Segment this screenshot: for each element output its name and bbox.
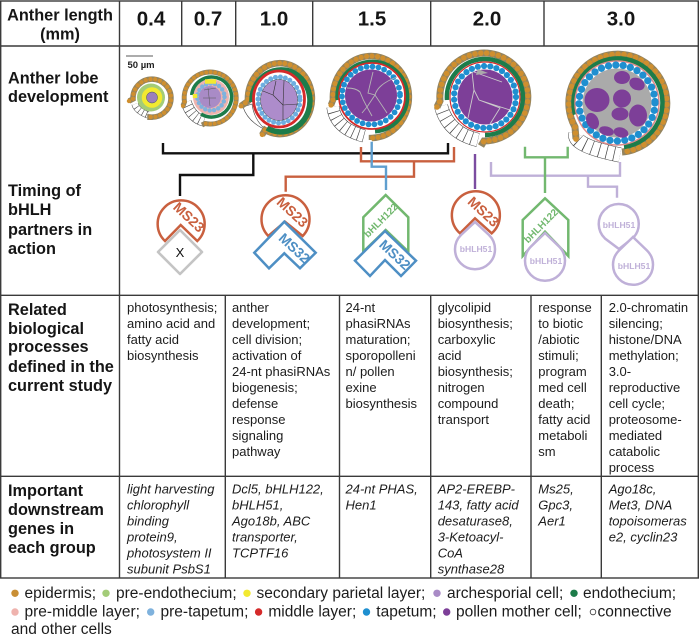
processes: column 3: exine <box>346 380 377 395</box>
processes: column 6: histone/DNA <box>609 332 682 347</box>
processes: column 4 <box>438 300 513 427</box>
genes: column 6: Ago18c, <box>608 482 656 496</box>
legend: secondary parietal layer; <box>256 585 425 602</box>
processes: column 1: photosynthesis; <box>127 300 217 315</box>
genes: column 6: topoisomeras <box>609 514 687 528</box>
heading: important downstream genes <box>8 482 104 557</box>
legend: pre-middle layer; <box>24 603 140 620</box>
genes: column 1 <box>126 482 215 576</box>
heading: anther lobe development <box>8 70 109 106</box>
genes: column 5: Gpc3, <box>538 498 573 512</box>
heading: important downstream genes: each group <box>8 539 96 557</box>
genes: column 1: chlorophyll <box>127 498 190 512</box>
genes: column 2: transporter, <box>232 530 298 544</box>
connector: purple line <box>474 154 476 189</box>
partners: bHLH122 and MS32 <box>355 195 416 276</box>
anther lobe 1.5 mm <box>331 56 409 140</box>
genes: column 2: Dcl5, bHLH122, <box>232 482 324 496</box>
genes: column 2: TCPTF16 <box>232 546 289 560</box>
legend <box>11 585 676 635</box>
anther lobe 3.0 mm <box>569 54 667 155</box>
processes: column 5: to biotic <box>538 316 584 331</box>
processes: column 4: transport <box>438 412 489 427</box>
heading: important downstream genes: downstream <box>8 501 104 519</box>
genes: column 4: 143, fatty acid <box>438 498 519 512</box>
partners: bHLH122 and bHLH51: bHLH122 <box>522 207 561 246</box>
anther length values: 2.0 <box>473 8 501 30</box>
processes: column 3: sporopolleni <box>346 348 416 363</box>
heading: related biological processes: processes <box>8 338 89 356</box>
connector: light purple bracket <box>491 162 620 198</box>
partners: MS23 and bHLH51: bHLH51 <box>460 244 492 254</box>
connector: green bracket <box>525 147 568 193</box>
processes: column 5: stimuli; <box>538 348 579 363</box>
genes: column 5: Ms25, <box>538 482 574 496</box>
heading: anther length: Anther length <box>7 7 113 25</box>
genes: column 2: Ago18b, ABC <box>231 514 311 528</box>
legend: epidermis; <box>24 585 96 602</box>
genes: column 1: light harvesting <box>127 482 215 496</box>
partners: bHLH51 homodimer: bHLH51 <box>603 220 635 230</box>
genes: column 4: desaturase8, <box>438 514 513 528</box>
processes: column 2: activation of <box>232 348 302 363</box>
legend: middle layer; <box>268 603 356 620</box>
heading: related biological processes: defined in the <box>8 358 114 376</box>
processes: column 3: phasiRNAs <box>346 316 411 331</box>
anther length values: 0.7 <box>194 8 222 30</box>
genes: column 5 <box>537 482 574 528</box>
heading: anther lobe development: Anther lobe <box>8 70 98 88</box>
legend: archesporial cell; <box>447 585 563 602</box>
heading: related biological processes: Related <box>8 301 67 319</box>
processes: column 6: 3.0- <box>609 364 631 379</box>
genes: column 1: binding <box>127 514 170 528</box>
genes: column 3 <box>344 482 418 512</box>
genes: column 1: subunit PsbS1 <box>127 562 211 576</box>
genes: column 4: CoA <box>438 546 463 560</box>
processes: column 6: proteosome- <box>609 412 682 427</box>
connector: black bracket <box>163 143 448 196</box>
scale bar <box>126 56 155 71</box>
heading: timing of bHLH partners: partners in <box>8 221 92 239</box>
processes: column 3: biosynthesis <box>346 396 418 411</box>
heading: timing of bHLH partners: action <box>8 240 56 258</box>
processes: column 2: signaling <box>232 428 283 443</box>
processes: column 6: mediated <box>609 428 662 443</box>
processes: column 5: metaboli <box>538 428 588 443</box>
processes: column 2: response <box>232 412 285 427</box>
processes: column 5 <box>538 300 592 459</box>
connector: red bracket <box>286 147 454 192</box>
genes: column 6: Met3, DNA <box>609 498 672 512</box>
genes: column 6 <box>608 482 687 544</box>
genes: column 5: Aer1 <box>537 514 566 528</box>
partners: MS23 and bHLH51 <box>452 191 502 269</box>
processes: column 2: pathway <box>232 444 281 459</box>
processes: column 5: med cell <box>538 380 587 395</box>
processes: column 6: cell cycle; <box>609 396 665 411</box>
partners: bHLH51 homodimer: bHLH51 <box>618 261 650 271</box>
processes: column 2: cell division; <box>232 332 302 347</box>
heading: anther lobe development: development <box>8 88 109 106</box>
heading: important downstream genes: Important <box>8 482 84 500</box>
processes: column 5: death; <box>538 396 574 411</box>
connector: blue line <box>372 142 386 190</box>
heading: important downstream genes: genes in <box>8 520 74 538</box>
processes: column 6 <box>609 300 688 475</box>
partners: MS23 and MS32 <box>254 194 316 268</box>
processes: column 3: 24-nt <box>346 300 376 315</box>
partners: MS23 and X: MS23 <box>170 199 208 235</box>
processes: column 3: maturation; <box>346 332 411 347</box>
partners: bHLH122 and MS32: bHLH122 <box>362 201 401 240</box>
processes: column 2: development; <box>232 316 310 331</box>
partners: bHLH122 and bHLH51 <box>522 198 568 281</box>
genes: column 4: AP2-EREBP- <box>437 482 516 496</box>
processes: column 5: fatty acid <box>538 412 590 427</box>
processes: column 5: sm <box>538 444 556 459</box>
heading: related biological processes <box>8 301 114 395</box>
processes: column 1: amino acid and <box>127 316 215 331</box>
anther length values: 1.0 <box>260 8 288 30</box>
genes: column 6: e2, cyclin23 <box>609 530 678 544</box>
processes: column 6: methylation; <box>609 348 679 363</box>
processes: column 4: acid <box>438 348 462 363</box>
processes: column 4: biosynthesis; <box>438 364 513 379</box>
processes: column 4: compound <box>438 396 498 411</box>
heading: related biological processes: current study <box>8 377 112 395</box>
partners: MS23 and X <box>158 199 208 274</box>
processes: column 6: process <box>609 460 655 475</box>
processes: column 5: response <box>538 300 592 315</box>
anther length values: 1.5 <box>358 8 386 30</box>
legend: connective <box>598 603 672 620</box>
processes: column 2: anther <box>232 300 270 315</box>
heading: related biological processes: biological <box>8 320 84 338</box>
heading: anther length <box>7 7 113 44</box>
legend: endothecium; <box>583 585 676 602</box>
processes: column 2 <box>232 300 331 459</box>
processes: column 6: reproductive <box>609 380 680 395</box>
anther length values: 0.4 <box>137 8 166 30</box>
partners: bHLH122 and MS32: MS32 <box>376 236 414 273</box>
anther lobe 0.7 mm <box>183 72 236 125</box>
anther lobe 1.0 mm <box>241 63 312 135</box>
heading: anther length: (mm) <box>40 26 80 44</box>
processes: column 6: silencing; <box>609 316 663 331</box>
partners: MS23 and MS32: MS23 <box>274 194 311 230</box>
legend: pre-tapetum; <box>160 603 248 620</box>
anther lobe 0.4 mm <box>129 79 171 120</box>
partners: bHLH51 homodimer <box>599 204 653 285</box>
anther length values: 3.0 <box>607 8 635 30</box>
genes: column 2: bHLH51, <box>232 498 283 512</box>
processes: column 6: catabolic <box>609 444 661 459</box>
genes: column 1: photosystem II <box>126 546 212 560</box>
processes: column 1: fatty acid <box>127 332 179 347</box>
genes: column 4 <box>437 482 519 576</box>
genes: column 1: protein9, <box>126 530 178 544</box>
legend: tapetum; <box>376 603 437 620</box>
heading: timing of bHLH partners <box>8 182 92 258</box>
anther length values <box>137 8 635 30</box>
processes: column 4: glycolipid <box>438 300 491 315</box>
processes: column 4: carboxylic <box>438 332 496 347</box>
processes: column 3 <box>346 300 418 411</box>
processes: column 1 <box>127 300 217 363</box>
processes: column 2: defense <box>232 396 278 411</box>
genes: column 4: synthase28 <box>438 562 505 576</box>
partners: MS23 and bHLH51: MS23 <box>465 193 502 230</box>
legend: pre-endothecium; <box>116 585 237 602</box>
processes: column 1: biosynthesis <box>127 348 199 363</box>
processes: column 2: 24-nt phasiRNAs <box>232 364 331 379</box>
heading: timing of bHLH partners: Timing of <box>8 182 82 200</box>
legend: pollen mother cell; <box>456 603 582 620</box>
processes: column 6: 2.0-chromatin <box>609 300 688 315</box>
scale bar: 50 µm <box>128 60 155 71</box>
processes: column 2: biogenesis; <box>232 380 298 395</box>
heading: timing of bHLH partners: bHLH <box>8 201 51 219</box>
partners: bHLH122 and bHLH51: bHLH51 <box>530 256 562 266</box>
genes: column 3: Hen1 <box>346 498 377 512</box>
processes: column 5: program <box>538 364 587 379</box>
processes: column 5: /abiotic <box>538 332 580 347</box>
processes: column 3: n/ pollen <box>346 364 395 379</box>
processes: column 4: nitrogen <box>438 380 485 395</box>
genes: column 3: 24-nt PHAS, <box>344 482 418 496</box>
partners: MS23 and MS32: MS32 <box>276 230 313 266</box>
genes: column 2 <box>231 482 324 560</box>
genes: column 4: 3-Ketoacyl- <box>438 530 504 544</box>
processes: column 4: biosynthesis; <box>438 316 513 331</box>
anther lobe 2.0 mm <box>437 53 528 146</box>
partners: MS23 and X: X <box>176 245 185 260</box>
